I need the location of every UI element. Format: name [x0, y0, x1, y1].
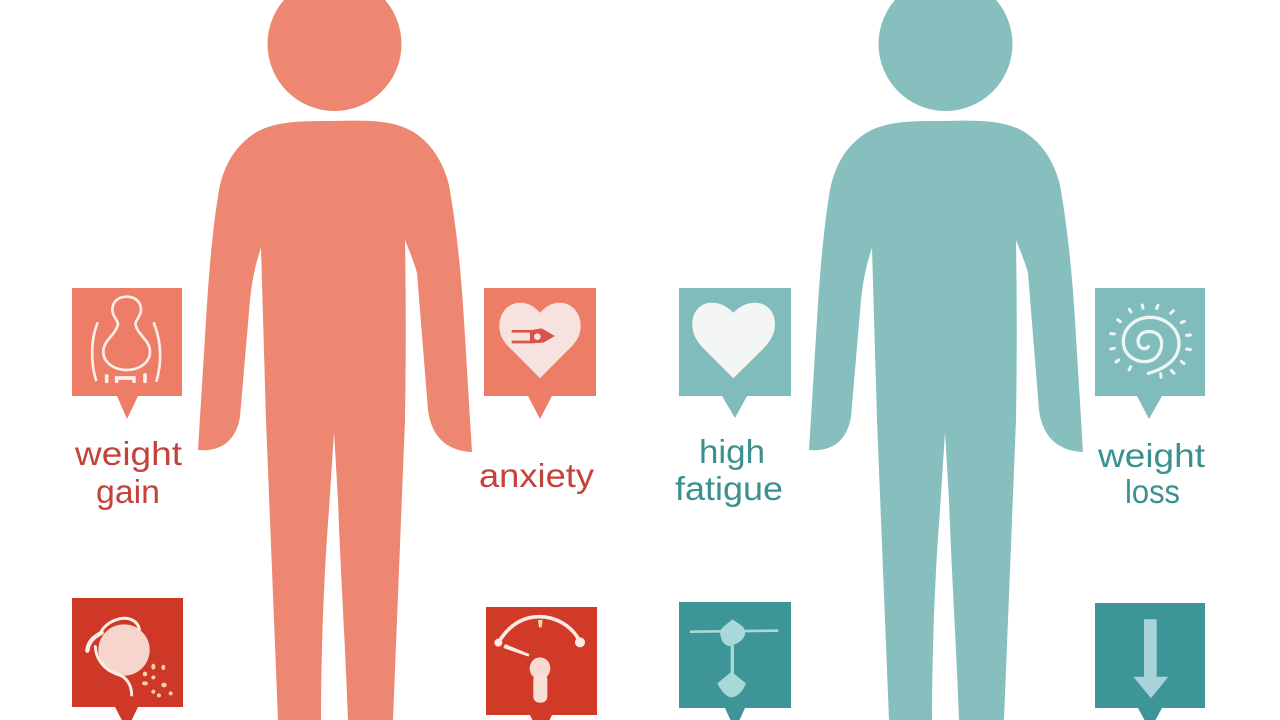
marker box [1095, 288, 1205, 419]
callout: weight gain [72, 288, 182, 510]
marker box [484, 288, 596, 419]
icon: connected nodes [690, 619, 778, 697]
callout: high fatigue [675, 288, 791, 507]
marker box [72, 598, 183, 720]
figure: coral person [198, 0, 472, 720]
label: weight [74, 435, 182, 472]
label: high [699, 433, 765, 470]
figure: teal person [809, 0, 1083, 720]
marker box [72, 288, 182, 419]
label: weight [1097, 437, 1205, 474]
icon: body outline [92, 297, 160, 381]
coral body [198, 121, 472, 720]
callout: dark red stomach marker [72, 598, 183, 720]
icon: pen [512, 328, 555, 343]
icon: round belly with particles [87, 618, 173, 697]
callout: dark red gauge marker [486, 607, 597, 720]
label: loss [1125, 473, 1180, 510]
icon: heart with pen [499, 303, 581, 378]
teal head [878, 0, 1012, 111]
callout: anxiety [479, 288, 596, 494]
icon: spiral [1111, 305, 1190, 377]
icon: down arrow [1133, 619, 1168, 698]
icon: heart [692, 303, 775, 378]
marker box [679, 288, 791, 418]
callout: dark teal arrow marker [1095, 603, 1205, 720]
label: gain [96, 473, 160, 510]
coral head [268, 0, 402, 111]
label: anxiety [479, 457, 595, 494]
marker box [1095, 603, 1205, 720]
teal body [809, 121, 1083, 720]
marker box [679, 602, 791, 720]
callout: dark teal network marker [679, 602, 791, 720]
callout: weight loss [1095, 288, 1205, 510]
marker box [486, 607, 597, 720]
label: fatigue [675, 470, 783, 507]
icon: gauge with bulb [494, 617, 585, 703]
